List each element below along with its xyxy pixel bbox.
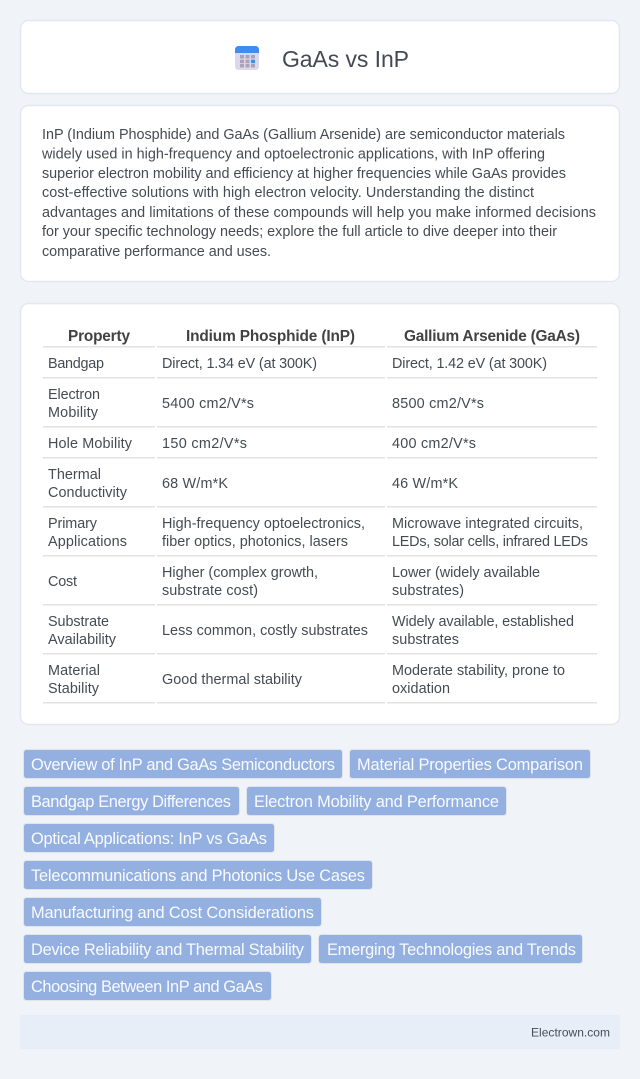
footer <box>20 1015 620 1049</box>
row: electron mobility: 5400 cm2/V*s <box>162 396 254 412</box>
table header row: Property <box>68 328 130 345</box>
row: primary applications: fiber optics, photonics, lasers <box>162 534 348 550</box>
row: primary applications: High-frequency optoelectronics, <box>162 516 365 532</box>
row: cost: Cost <box>48 574 77 590</box>
tag: choosing <box>24 972 272 1000</box>
panel: introduction <box>20 106 620 282</box>
row: cost: Lower (widely available <box>392 565 540 581</box>
row: hole mobility <box>43 436 597 458</box>
intro text block: InP (Indium Phosphide) and GaAs (Gallium Arsenide) are semiconductor materials <box>42 127 565 143</box>
tag: material properties: Material Properties Comparison <box>357 756 583 774</box>
row: hole mobility: Hole Mobility <box>48 436 133 452</box>
row: substrate availability <box>43 614 597 654</box>
row: material stability <box>43 663 597 704</box>
header panel <box>20 20 620 94</box>
row: material stability: Stability <box>48 681 100 697</box>
row: material stability: Material <box>48 663 100 679</box>
row: primary applications: LEDs, solar cells, infrared LEDs <box>392 534 588 550</box>
row: electron mobility: 8500 cm2/V*s <box>392 396 484 412</box>
row: thermal conductivity: Thermal <box>48 467 101 483</box>
row: substrate availability: Availability <box>48 632 117 648</box>
row: substrate availability: Widely available, established <box>392 614 574 630</box>
row: substrate availability: Substrate <box>48 614 109 630</box>
row: cost: substrate cost) <box>162 583 258 599</box>
tag: material properties <box>350 750 590 778</box>
intro text block: widely used in high-frequency and optoelectronic applications, with InP offering <box>41 146 545 162</box>
intro text block: superior electron mobility and efficiency at higher frequencies while GaAs provides <box>42 166 566 182</box>
tag: manufacturing <box>24 898 322 926</box>
row: cost: Higher (complex growth, <box>162 565 318 581</box>
icon: calendar grid <box>235 46 259 70</box>
footer credit: Electrown.com <box>531 1026 610 1040</box>
tag: optical applications: Optical Applications: InP vs GaAs <box>31 830 267 848</box>
row: bandgap <box>43 356 597 378</box>
row: material stability: Good thermal stability <box>162 672 303 688</box>
tag: device reliability <box>24 934 312 964</box>
row: bandgap: Direct, 1.34 eV (at 300K) <box>162 356 317 372</box>
row: material stability: Moderate stability, prone to <box>392 663 565 679</box>
row: electron mobility <box>43 387 597 428</box>
row: thermal conductivity: 68 W/m*K <box>162 476 228 492</box>
topic tags <box>24 750 590 1000</box>
row: cost: substrates) <box>392 583 464 599</box>
row: primary applications: Primary <box>48 516 98 532</box>
row: thermal conductivity <box>43 467 597 508</box>
table header row: Indium Phosphide (InP) <box>186 328 355 345</box>
tag: telecommunications <box>24 860 372 890</box>
intro text block: cost-effective solutions with high electron velocity. Understanding the distinct <box>42 185 534 201</box>
row: primary applications: Microwave integrated circuits, <box>392 516 583 532</box>
row: thermal conductivity: 46 W/m*K <box>392 476 458 492</box>
tag: emerging technologies <box>318 934 582 964</box>
row: primary applications <box>43 516 597 556</box>
tag: bandgap energy <box>24 786 240 816</box>
intro text block <box>41 127 596 260</box>
tag: overview: Overview of InP and GaAs Semiconductors <box>31 756 335 774</box>
row: thermal conductivity: Conductivity <box>48 485 128 501</box>
row: cost <box>43 565 597 606</box>
tag: telecommunications: Telecommunications and Photonics Use Cases <box>31 867 365 885</box>
intro text block: advantages and limitations of these compounds will help you make informed decisions <box>42 205 596 221</box>
row: bandgap: Bandgap <box>48 356 104 372</box>
tag: electron mobility: Electron Mobility and Performance <box>254 793 499 811</box>
tag: bandgap energy: Bandgap Energy Differences <box>31 793 231 811</box>
row: hole mobility: 400 cm2/V*s <box>392 436 476 452</box>
row: substrate availability: substrates <box>392 632 459 648</box>
table header row: Gallium Arsenide (GaAs) <box>404 328 580 345</box>
tag: optical applications <box>24 824 274 852</box>
tag: device reliability: Device Reliability and Thermal Stability <box>31 941 305 959</box>
intro text block: for your specific technology needs; explore the full article to dive deeper into their <box>42 224 557 240</box>
table header row <box>43 328 597 348</box>
row: electron mobility: Mobility <box>48 405 99 421</box>
row: material stability: oxidation <box>392 681 450 697</box>
row: primary applications: Applications <box>48 534 127 550</box>
row: hole mobility: 150 cm2/V*s <box>162 436 247 452</box>
tag: choosing: Choosing Between InP and GaAs <box>31 978 263 996</box>
row: electron mobility: Electron <box>48 387 100 403</box>
intro text block: comparative performance and uses. <box>42 244 271 260</box>
panel: comparison table <box>20 304 620 724</box>
tag: manufacturing: Manufacturing and Cost Considerations <box>31 904 314 922</box>
title: GaAs vs InP <box>282 46 409 72</box>
tag: overview <box>24 750 342 778</box>
row: substrate availability: Less common, costly substrates <box>162 623 368 639</box>
tag: emerging technologies: Emerging Technologies and Trends <box>327 941 576 959</box>
row: bandgap: Direct, 1.42 eV (at 300K) <box>392 356 547 372</box>
tag: electron mobility <box>246 786 506 816</box>
